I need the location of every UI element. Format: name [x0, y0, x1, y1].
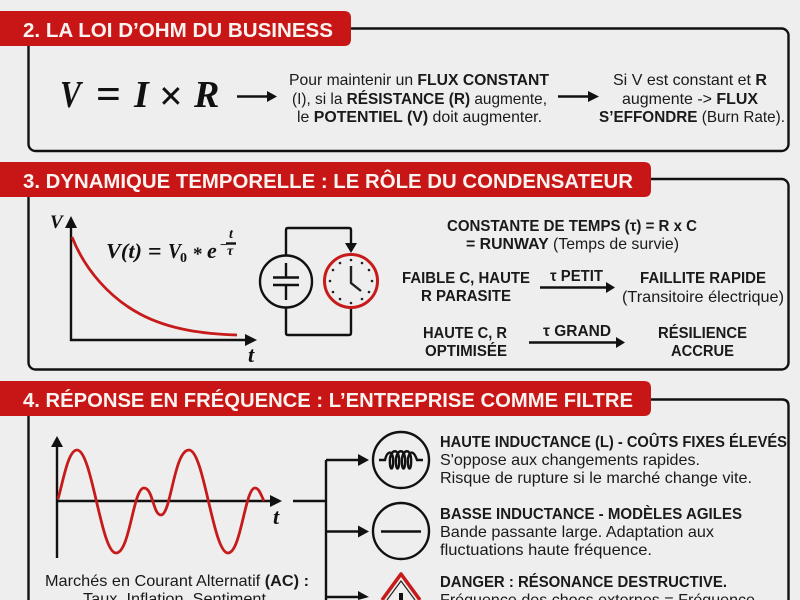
- branching arrows: [293, 454, 369, 600]
- chart: voltage decay: [50, 212, 257, 367]
- icon: capacitor: [260, 256, 312, 308]
- panel: réponse en fréquence: [0, 381, 788, 600]
- formula: V = I x R: V: [60, 74, 83, 116]
- formula: V = I x R: ×: [159, 74, 183, 120]
- icon: capacitor and clock circuit: [260, 228, 378, 335]
- formula: V(t): e: [207, 238, 217, 263]
- formula: V = I x R: [60, 70, 219, 120]
- heading: section 4: [0, 381, 651, 416]
- text: maintaining flow: le POTENTIEL (V) doit augmenter.: [297, 109, 542, 126]
- text: high capacity: HAUTE C, R: [423, 325, 507, 342]
- arrow: tau grand: τ GRAND: [543, 323, 611, 340]
- panel frame: section 2: [28, 28, 788, 151]
- text: low capacity: R PARASITE: [421, 288, 511, 305]
- text: low inductance: Bande passante large. Adaptation aux: [440, 524, 714, 541]
- text: burn rate consequence: [599, 72, 785, 126]
- text: burn rate consequence: Si V est constant et R: [613, 72, 767, 89]
- text: maintaining flow: [289, 72, 549, 126]
- text: low capacity: FAIBLE C, HAUTE: [402, 270, 530, 287]
- chart: voltage decay: t: [248, 342, 255, 367]
- text: time constant: = RUNWAY (Temps de survie): [466, 236, 679, 253]
- panel: loi d'Ohm: [0, 11, 788, 151]
- text: maintaining flow: Pour maintenir un FLUX CONSTANT: [289, 72, 549, 89]
- text: burn rate consequence: S’EFFONDRE (Burn Rate).: [599, 109, 785, 126]
- text: high inductance: [440, 432, 787, 487]
- icon: danger triangle: [382, 574, 420, 600]
- text: resilience: ACCRUE: [671, 343, 734, 360]
- text: rapid failure: (Transitoire électrique): [622, 289, 784, 306]
- text: danger resonance: DANGER : RÉSONANCE DESTRUCTIVE.: [440, 572, 727, 591]
- formula: V(t): =: [148, 239, 162, 265]
- icon: inductor: [373, 432, 429, 488]
- heading: section 2: 2. LA LOI D’OHM DU BUSINESS: [23, 20, 333, 42]
- formula: V(t): −: [220, 237, 227, 252]
- arrow: tau petit: τ PETIT: [550, 268, 603, 285]
- arrow: tau grand: [529, 323, 625, 348]
- text: high inductance: S'oppose aux changements rapides.: [440, 452, 700, 469]
- text: resilience: [658, 323, 747, 360]
- text: low capacity: [402, 270, 530, 305]
- text: AC markets: [45, 573, 309, 600]
- formula: V(t): [106, 227, 236, 266]
- text: low inductance: BASSE INDUCTANCE - MODÈLES AGILES: [440, 504, 742, 523]
- heading: section 3: 3. DYNAMIQUE TEMPORELLE : LE RÔLE DU CONDENSATEUR: [23, 169, 634, 193]
- heading: section 2: [0, 11, 351, 46]
- chart: AC wave: [51, 436, 282, 558]
- heading: section 4: 4. RÉPONSE EN FRÉQUENCE : L’ENTREPRISE COMME FILTRE: [23, 389, 633, 412]
- text: high capacity: [423, 325, 507, 360]
- formula: V(t): 0: [180, 251, 187, 266]
- text: high inductance: Risque de rupture si le marché change vite.: [440, 470, 752, 487]
- arrow: tau petit: [540, 268, 615, 293]
- text: time constant: CONSTANTE DE TEMPS (τ) = R x C: [447, 218, 697, 235]
- panel frame: section 4: [28, 400, 788, 600]
- formula: V(t): V(t): [106, 239, 142, 263]
- text: low inductance: fluctuations haute fréquence.: [440, 542, 652, 559]
- arrow: formula to explanation: [237, 91, 277, 102]
- chart: voltage decay: V: [50, 212, 64, 233]
- formula: V = I x R: R: [193, 74, 219, 116]
- formula: V = I x R: =: [96, 70, 121, 119]
- formula: V(t): τ: [227, 244, 234, 259]
- icon: low inductance wire: [373, 503, 429, 559]
- text: danger resonance: [440, 572, 755, 600]
- text: low inductance: [440, 504, 742, 559]
- text: rapid failure: [622, 270, 784, 306]
- formula: V(t): t: [229, 227, 234, 242]
- icon: clock: [324, 254, 378, 308]
- formula: V(t): V: [168, 239, 183, 263]
- text: maintaining flow: (I), si la RÉSISTANCE (R) augmente,: [292, 89, 547, 108]
- text: rapid failure: FAILLITE RAPIDE: [640, 270, 766, 287]
- formula: V = I x R: I: [133, 74, 150, 116]
- text: time constant: [447, 218, 697, 253]
- arrow: explanation to consequence: [558, 91, 599, 102]
- text: AC markets: Marchés en Courant Alternatif (AC) :: [45, 573, 309, 590]
- text: resilience: RÉSILIENCE: [658, 323, 747, 342]
- formula: V(t): *: [193, 244, 202, 265]
- text: burn rate consequence: augmente -> FLUX: [622, 91, 758, 108]
- panel frame: section 3: [28, 179, 788, 370]
- chart: AC wave: t: [273, 504, 280, 529]
- heading: section 3: [0, 162, 651, 197]
- text: high capacity: OPTIMISÉE: [425, 341, 507, 360]
- panel: dynamique temporelle: [0, 162, 788, 370]
